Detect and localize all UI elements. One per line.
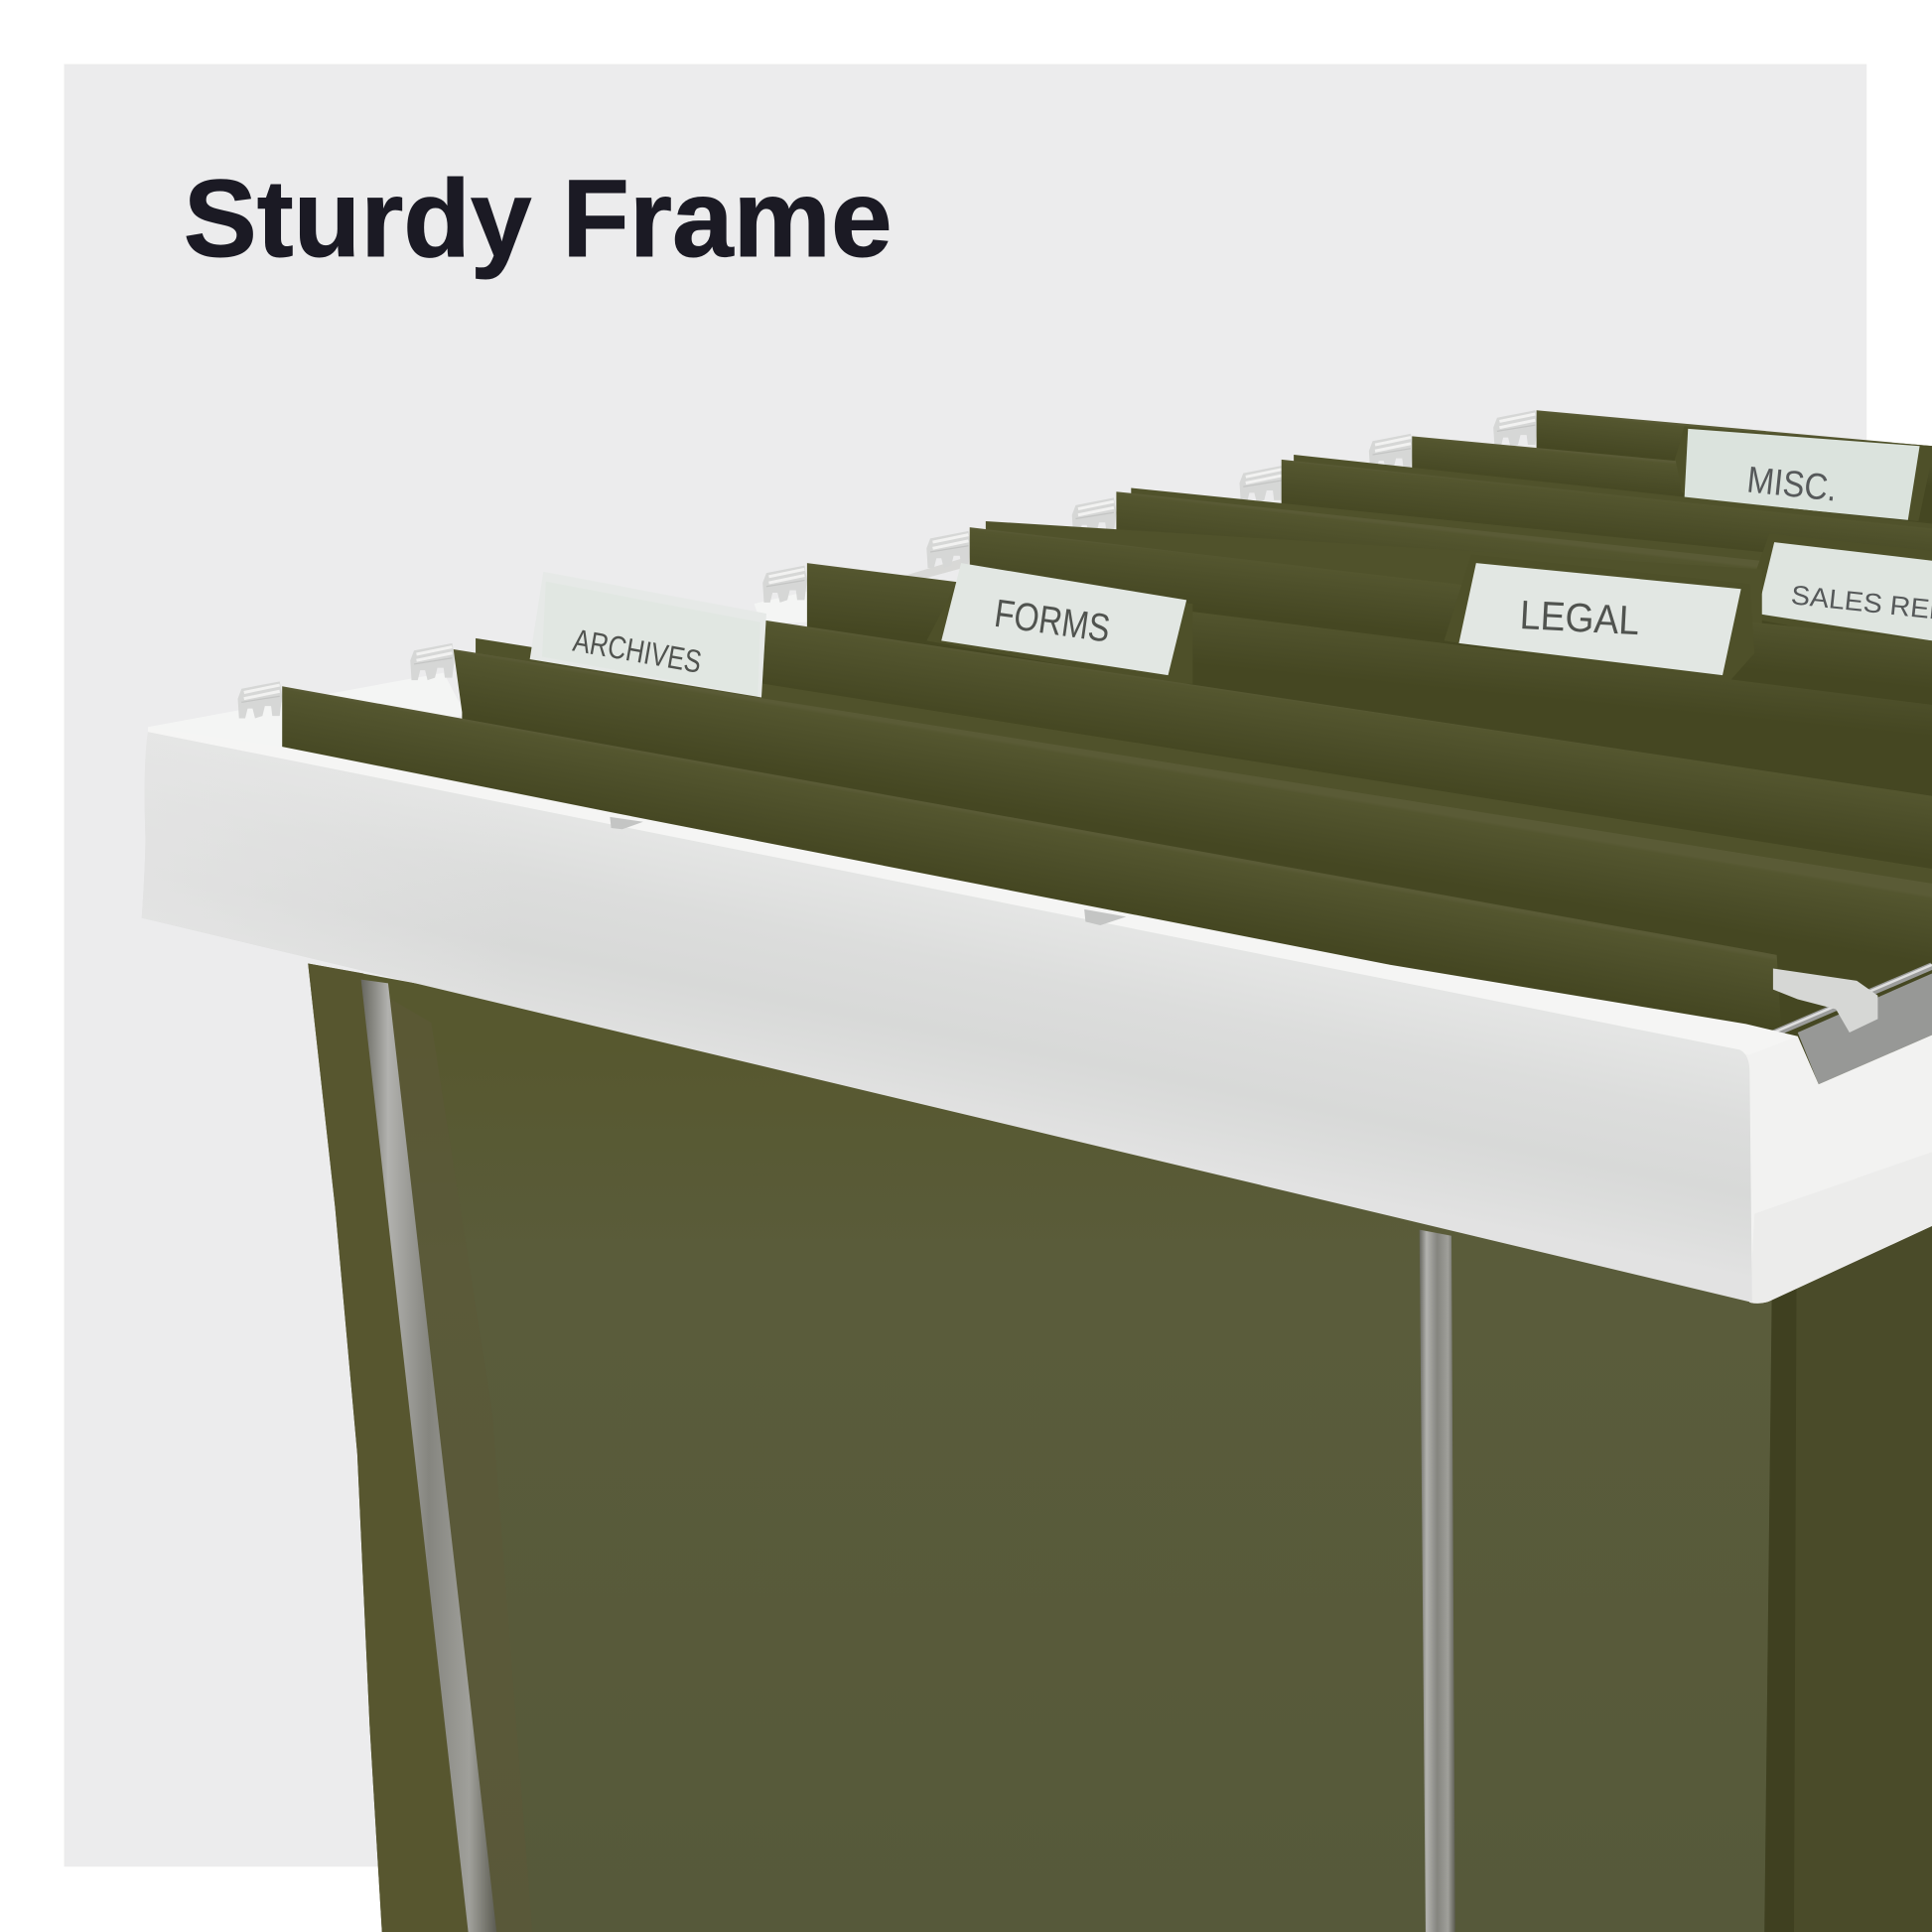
folder 6 front: [1282, 460, 1932, 1109]
frame notch left: [610, 817, 643, 829]
folder hanger clips: [238, 410, 1538, 719]
side panel: [1787, 1182, 1932, 1932]
tab: FORMS: [926, 563, 1192, 684]
folder 2 front: [454, 649, 1932, 1109]
folder 3: [807, 563, 1932, 1109]
left section shade: [308, 964, 469, 1932]
front face left highlight: [142, 732, 517, 1007]
folder 6 back: [1294, 455, 1932, 1109]
folder 2 rear: [761, 620, 1932, 1109]
right face lower band: [1749, 1152, 1932, 1304]
folder 5 back: [1131, 487, 1932, 1109]
left wire support: [361, 980, 496, 1932]
side fold: [1764, 1288, 1796, 1932]
hanging file box illustration: [142, 410, 1932, 1932]
rod highlight: [1753, 965, 1932, 1041]
tab: SALES REP: [1739, 533, 1932, 653]
tab: ARCHIVES: ARCHIVES: [571, 622, 704, 680]
rail trough: [1798, 973, 1932, 1084]
folder 4 front: [970, 527, 1932, 1109]
left frame rail: [148, 557, 967, 755]
brown tint beside wire: [389, 998, 532, 1932]
main body panel: [308, 964, 1774, 1932]
frame front face: [142, 732, 1752, 1303]
folder 7: [1412, 436, 1932, 1109]
tab: FORMS: FORMS: [992, 592, 1113, 651]
steel rod: [1753, 966, 1932, 1042]
tab: MISC: [1666, 426, 1932, 527]
frame notch right: [1084, 909, 1126, 925]
folders, back to front: [282, 410, 1932, 1109]
metal rail and corner clip: [1753, 965, 1932, 1084]
tab: ARCHIVES: [530, 572, 766, 697]
folder 2 middle: [476, 638, 1932, 1109]
folder 1: [282, 686, 1782, 1035]
right frame face: [1725, 1035, 1932, 1304]
folder 8: [1537, 410, 1932, 1109]
plastic hanger clip: [1773, 968, 1877, 1033]
folder 5 front: [1116, 491, 1932, 1109]
white frame: [142, 727, 1932, 1304]
tab: MISC: MISC.: [1745, 458, 1839, 509]
frame top lip: [148, 727, 1798, 1054]
title: Sturdy Frame: [184, 158, 893, 280]
folder 4 back: [986, 521, 1762, 1109]
tab: LEGAL: LEGAL: [1519, 592, 1640, 643]
folder body below frame: [308, 964, 1932, 1932]
tab: LEGAL: [1445, 554, 1754, 684]
right wire support: [1420, 1230, 1455, 1932]
